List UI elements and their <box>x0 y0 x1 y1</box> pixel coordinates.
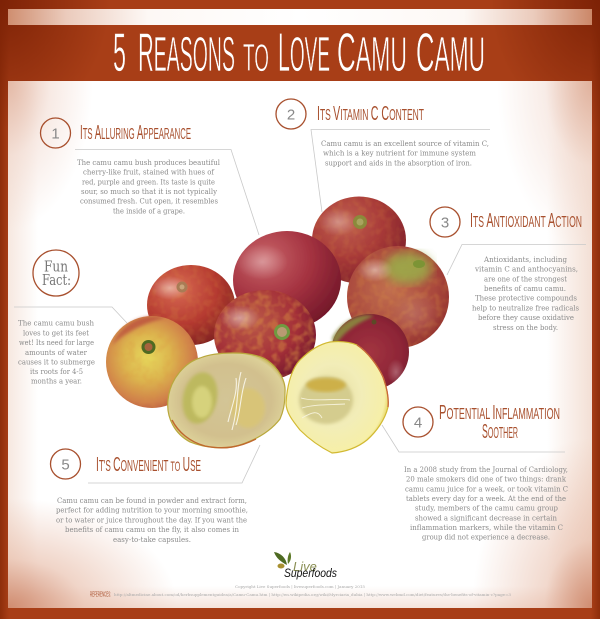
illustration: camu camu fruits <box>106 196 449 453</box>
text 3: Antioxidants, including <box>483 255 567 264</box>
copyright line: Copyright Live Superfoods | livesuperfoods.com | January 2015 <box>235 584 365 589</box>
text 4 <box>404 465 568 542</box>
fun fact text: its roots for 4-5 <box>30 367 83 376</box>
fruit: right cut half <box>286 342 388 453</box>
text 1: consumed fresh. Cut open, it resembles <box>80 197 218 206</box>
text 2: which is a key nutrient for immune system <box>323 149 476 158</box>
text 5 <box>56 496 248 544</box>
section 5: convenient <box>50 449 248 544</box>
fruit: big back centre <box>233 231 341 329</box>
heading 4 <box>439 402 560 443</box>
badge 3 <box>430 207 460 237</box>
text 1: cherry-like fruit, stained with hues of <box>83 168 215 177</box>
references: REFERENCES: <box>90 592 111 598</box>
text 4: In a 2008 study from the Journal of Cardiology, <box>404 465 568 474</box>
text 2: support and aids in the absorption of iron. <box>325 158 472 167</box>
section 2: vitamin C <box>276 99 489 167</box>
logo: Live Superfoods: Live <box>293 559 317 574</box>
text 4: group did not experience a decrease. <box>422 533 550 542</box>
fun fact badge: Fun <box>44 258 68 276</box>
section: fun fact <box>18 250 95 386</box>
references: http://altmedicine.about.com/od/herbsupplementguidea/a/Camu-Camu.htm | http://en.wikipedia.org/wiki/Myrciaria_dubia | http://www.webmd.com/diet/features/the-benefits-of-vitamin-c?page=3 <box>114 592 511 597</box>
fruit: right with green patches <box>347 246 449 348</box>
text 3: stress on the body. <box>493 323 558 332</box>
badge 4 <box>403 407 433 437</box>
badge 5: 5 <box>61 456 70 474</box>
badge 1: 1 <box>51 126 60 142</box>
title <box>113 21 485 83</box>
badge 4: 4 <box>414 414 422 432</box>
text 1: the inside of a grape. <box>113 206 185 215</box>
text 3: vitamin C and anthocyanins, <box>474 265 578 274</box>
heading 1: ITS ALLURING APPEARANCE <box>80 122 191 144</box>
logo: Live Superfoods <box>274 552 337 580</box>
fun fact text: The camu camu bush <box>18 318 94 327</box>
badge 1 <box>40 118 70 148</box>
text 5: or to water or juice throughout the day. If you want the <box>56 515 247 524</box>
fun fact text: wet! Its need for large <box>19 338 94 347</box>
text 5: easy-to-take capsules. <box>113 535 191 544</box>
heading 5: IT'S CONVENIENT TO USE <box>96 454 201 476</box>
section 1: alluring appearance <box>40 118 221 215</box>
badge 3: 3 <box>441 214 449 232</box>
fun fact badge: Fact: <box>42 271 71 289</box>
top decorative strip <box>8 9 592 25</box>
title: LOVE <box>278 21 330 83</box>
title: 5 <box>113 21 126 83</box>
section 4: inflammation <box>403 402 568 542</box>
fun fact badge <box>33 250 79 296</box>
title: TO <box>243 37 269 80</box>
section 3: antioxidant <box>430 207 582 332</box>
title: CAMU <box>337 21 407 83</box>
text 3 <box>472 255 579 332</box>
fruit: left back <box>147 265 235 345</box>
text 1 <box>77 158 221 215</box>
heading 2: ITS VITAMIN C CONTENT <box>317 103 424 125</box>
title: REASONS <box>138 21 235 83</box>
text 3: These protective compounds <box>475 294 577 303</box>
text 4: 20 male smokers did one of two things: drank <box>406 475 566 484</box>
fun fact text: amounts of water <box>25 348 87 357</box>
text 4: tablets every day for a week. At the end of the <box>406 494 566 503</box>
text 2 <box>321 139 489 167</box>
text 5: Camu camu can be found in powder and extract form, <box>57 496 247 505</box>
heading 4: SOOTHER <box>482 421 518 443</box>
icon: olive leaves <box>274 552 291 568</box>
text 3: help to neutralize free radicals <box>472 303 579 312</box>
references <box>90 592 511 598</box>
text 2: Camu camu is an excellent source of vitamin C, <box>321 139 489 148</box>
badge 5 <box>50 449 80 479</box>
text 5: perfect for adding nutrition to your morning smoothie, <box>56 506 248 515</box>
title: CAMU <box>416 21 485 83</box>
text 3: are one of the strongest <box>484 274 567 283</box>
fruit: left front yellow <box>106 316 198 408</box>
logo: Live Superfoods: Superfoods <box>284 566 337 580</box>
text 4: showed a significant decrease in certain <box>415 513 557 522</box>
fun fact text: causes it to submerge <box>18 358 95 367</box>
text 4: camu camu juice for a week, or took vitamin C <box>405 484 568 493</box>
badge 2: 2 <box>287 106 295 124</box>
text 4: inflammation markers, while the vitamin C <box>410 523 563 532</box>
fun fact text: months a year. <box>31 377 82 386</box>
text 3: before they cause oxidative <box>478 313 574 322</box>
text 4: study, members of the camu camu group <box>415 504 558 513</box>
text 3: benefits of camu camu. <box>484 284 566 293</box>
fun fact text: loves to get its feet <box>23 328 89 337</box>
text 1: sour, so much so that it is not typically <box>81 187 218 196</box>
fruit: centre front <box>214 290 316 380</box>
fun fact text <box>18 318 95 386</box>
connector lines <box>14 130 586 483</box>
badge 2 <box>276 99 306 129</box>
text 1: red, purple and green. Its taste is quite <box>82 177 215 186</box>
fruit: small right <box>331 314 409 390</box>
text 5: benefits of camu camu on the fly, it also comes in <box>65 525 239 534</box>
text 1: The camu camu bush produces beautiful <box>77 158 221 167</box>
fruit: back top right <box>312 196 406 284</box>
fruit: left cut half <box>168 353 285 448</box>
